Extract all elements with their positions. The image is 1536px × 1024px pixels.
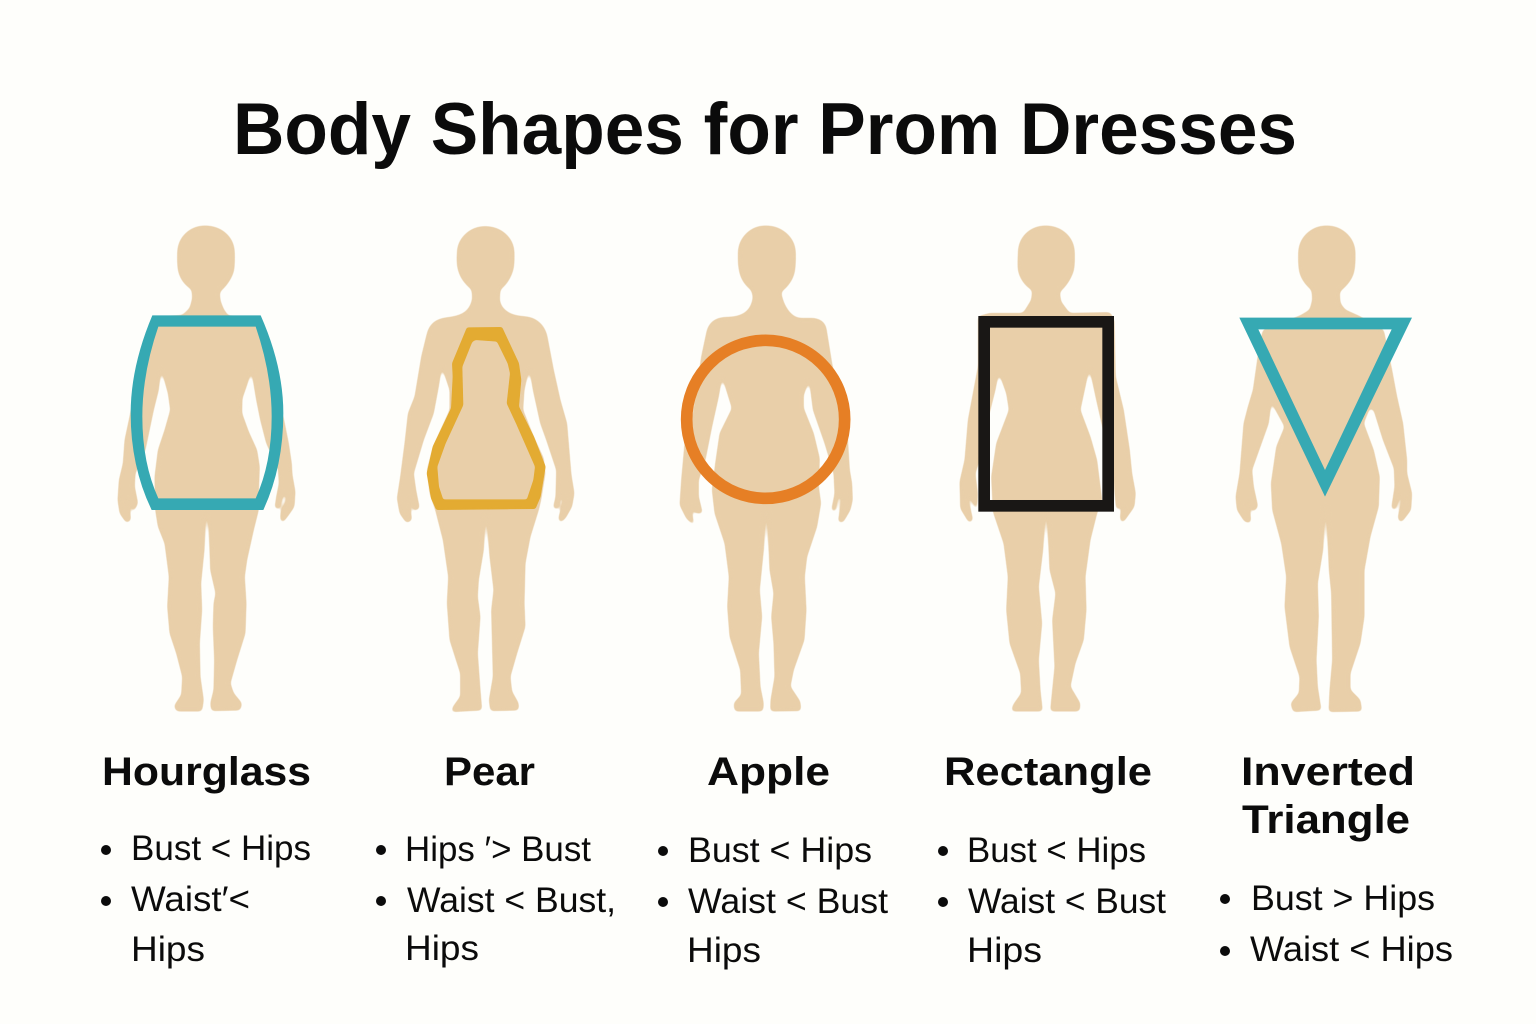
apple outline — [687, 340, 845, 498]
list: apple: Bust < Hips — [688, 831, 872, 870]
panel: apple figure — [680, 226, 852, 711]
heading: inverted triangle: Triangle — [1242, 798, 1410, 842]
list: pear: Hips — [405, 929, 479, 968]
list: rectangle — [938, 831, 1166, 970]
pear outline — [427, 328, 545, 509]
heading: inverted triangle: Inverted — [1241, 750, 1415, 794]
list: hourglass: Bust < Hips — [131, 829, 311, 868]
panel: rectangle figure — [960, 226, 1135, 711]
body silhouette — [960, 226, 1135, 711]
panel: hourglass figure — [118, 226, 295, 711]
list: pear — [376, 830, 616, 968]
inverted triangle outline — [1239, 318, 1412, 497]
heading: apple: Apple — [707, 750, 830, 794]
list: rectangle: Hips — [967, 931, 1042, 970]
body silhouette — [1236, 226, 1412, 712]
list: rectangle: Bust < Hips — [967, 831, 1146, 870]
list: rectangle: Waist < Bust — [968, 882, 1166, 921]
list: inverted triangle: Bust > Hips — [1251, 879, 1435, 918]
heading: hourglass: Hourglass — [102, 750, 311, 794]
list: inverted triangle — [1220, 879, 1453, 969]
list: apple: Hips — [687, 931, 761, 970]
heading: rectangle: Rectangle — [944, 750, 1152, 794]
list: pear: Waist < Bust, — [407, 881, 616, 920]
list: hourglass — [101, 829, 311, 969]
body silhouette — [118, 226, 295, 711]
list: apple: Waist < Bust — [688, 882, 888, 921]
list: hourglass: Waist′< — [131, 880, 250, 919]
heading: pear: Pear — [444, 750, 535, 794]
list: hourglass: Hips — [131, 930, 205, 969]
list: inverted triangle: Waist < Hips — [1250, 930, 1453, 969]
rectangle outline — [984, 322, 1108, 506]
hourglass outline — [131, 315, 283, 510]
panel: inverted triangle figure — [1236, 226, 1412, 712]
list: pear: Hips ′> Bust — [405, 830, 591, 869]
body silhouette — [397, 227, 574, 712]
list: apple — [658, 831, 888, 970]
panel: pear figure — [397, 227, 574, 712]
body silhouette — [680, 226, 852, 711]
heading: inverted triangle — [1241, 750, 1415, 842]
title: Body Shapes for Prom Dresses — [233, 89, 1297, 170]
